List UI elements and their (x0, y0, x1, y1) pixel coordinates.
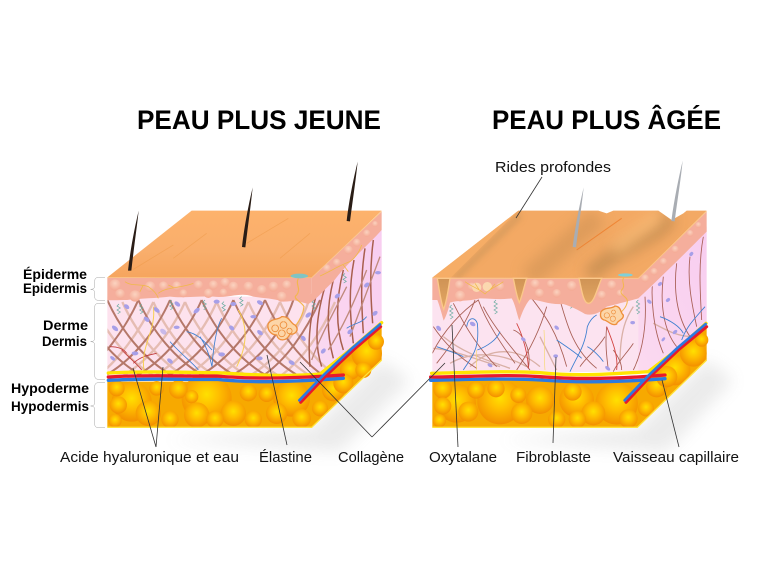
hairs (128, 162, 358, 271)
skin surface (107, 211, 382, 278)
layer brackets (91, 277, 105, 428)
hairs (573, 161, 683, 247)
sweat gland (268, 278, 304, 340)
infographic: skin comparison (12, 104, 738, 465)
label: dermis: Dermis (42, 334, 87, 349)
blood vessels (108, 323, 382, 402)
label: derme: Derme (43, 318, 89, 333)
dermis (432, 227, 707, 373)
label: fibroblaste: Fibroblaste (516, 450, 591, 466)
label: oxytalane: Oxytalane (429, 450, 497, 466)
label: hypoderme: Hypoderme (11, 381, 90, 396)
title: peau plus âgée: PEAU PLUS ÂGÉE (492, 104, 721, 135)
leader lines (133, 177, 679, 447)
panel: younger skin block (106, 162, 405, 452)
label: épiderme: Épiderme (23, 267, 88, 282)
dermis (107, 230, 382, 376)
fat layer (107, 325, 384, 428)
label: acide hyaluronique et eau: Acide hyaluronique et eau (60, 450, 239, 466)
label: epidermis: Epidermis (23, 281, 87, 296)
title: peau plus jeune: PEAU PLUS JEUNE (137, 105, 381, 135)
label: vaisseau capillaire: Vaisseau capillaire (613, 450, 739, 466)
panel: older skin block (431, 161, 733, 452)
sweat gland (600, 277, 627, 325)
wrinkled skin surface (432, 211, 707, 309)
epidermis with deep wrinkles (432, 211, 707, 321)
epidermis (107, 212, 382, 304)
blood vessels (431, 323, 707, 402)
fat layer (432, 325, 708, 428)
label: hypodermis: Hypodermis (11, 399, 89, 414)
label: rides profondes: Rides profondes (495, 160, 611, 176)
label: élastine: Élastine (259, 449, 312, 466)
label: collagène: Collagène (338, 450, 404, 466)
